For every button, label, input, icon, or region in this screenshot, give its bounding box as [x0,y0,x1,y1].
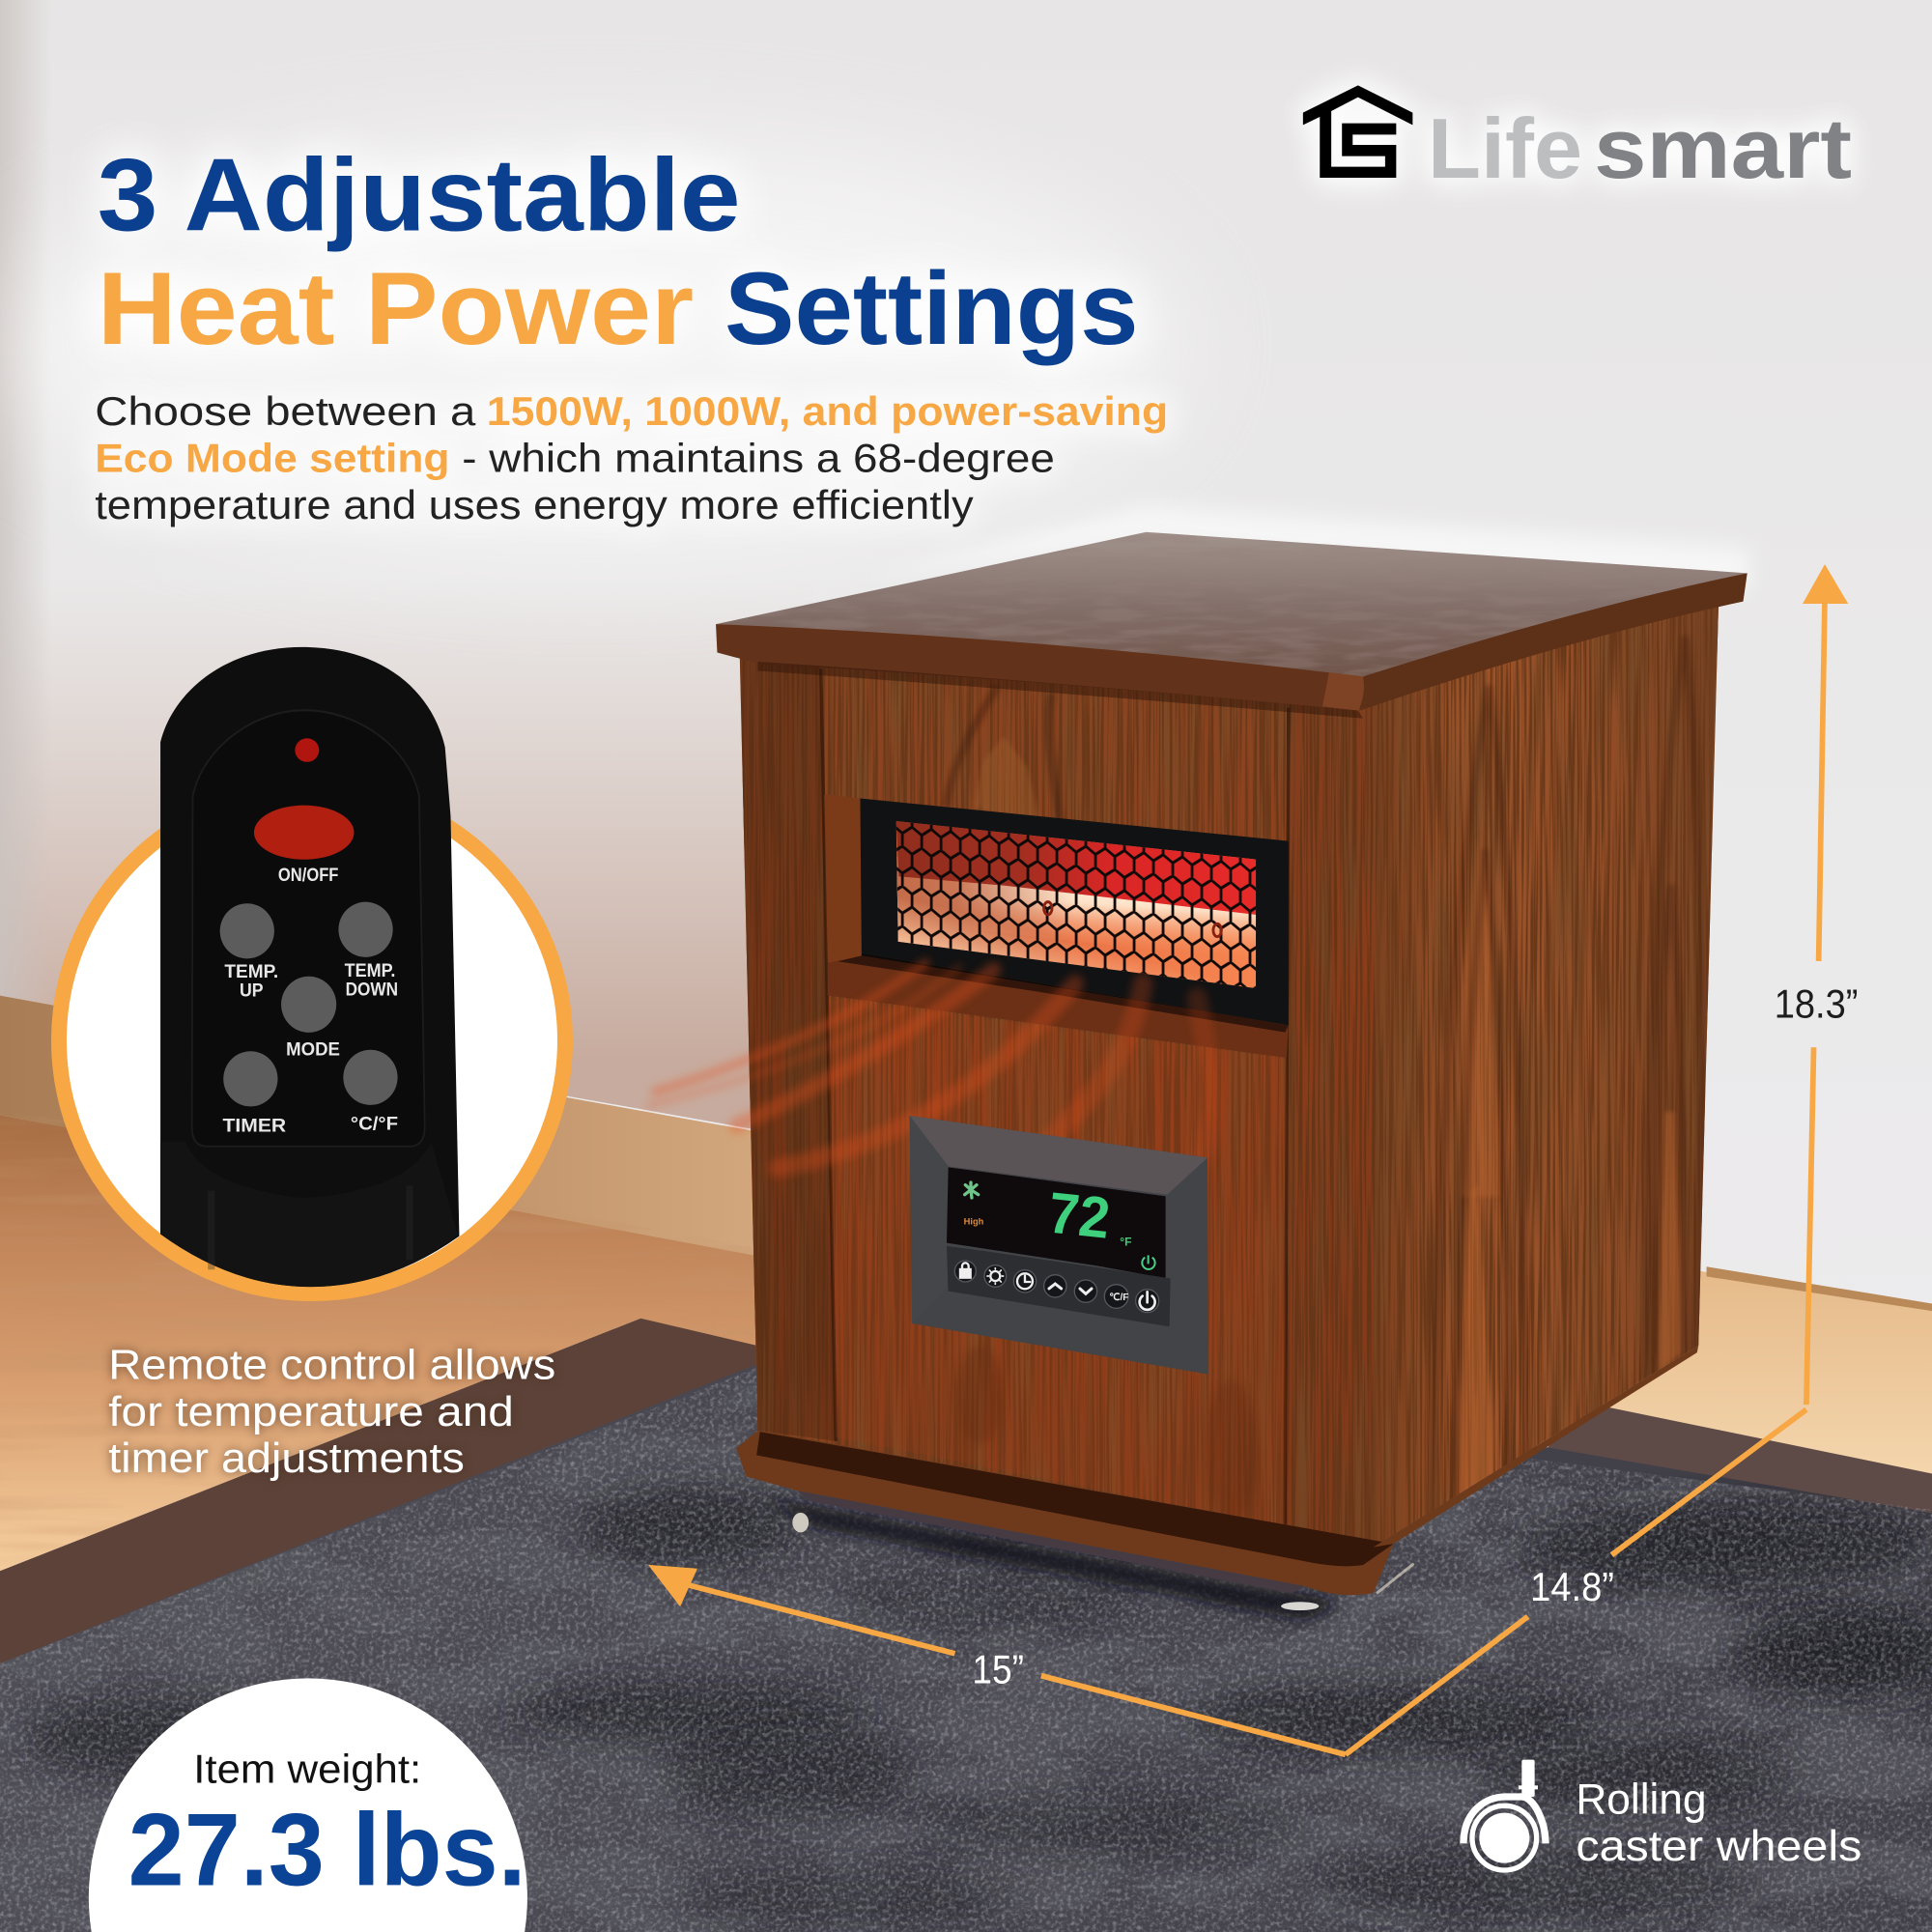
left floor [0,1115,788,1571]
remote caption: timer adjustments [108,1435,465,1482]
control panel: ℃/F [1109,1293,1128,1303]
description line 2: - which maintains a 68-degree [462,436,1055,481]
High label: High [964,1216,984,1226]
caster label [1576,1776,1861,1870]
remote lower ledge [160,1142,458,1287]
heater top rim [716,573,1747,719]
panel bevel [910,1116,1208,1195]
item weight badge [89,1678,527,1932]
depth dimension [1346,1409,1806,1754]
heading line 2: Settings [724,250,1139,366]
wall [0,0,1932,1355]
depth dimension: 14.8” [1530,1564,1614,1609]
button labels: MODE [286,1038,340,1060]
button labels: DOWN [346,980,398,1000]
wall left edge shading [0,0,52,1010]
caster feature [1463,1760,1861,1870]
heading line 1: 3 Adjustable [98,137,741,253]
description line 2: Eco Mode setting [95,436,450,481]
caster label: Rolling [1576,1776,1707,1824]
heater base [736,1346,1698,1610]
button labels: TIMER [223,1115,286,1136]
post divider lines [821,668,1289,1526]
rug blotches [132,1385,1932,1932]
display [947,1167,1166,1278]
caster label: caster wheels [1576,1823,1861,1870]
panel housing [910,1116,1208,1375]
rug pile light [0,1361,1932,1932]
button labels: TEMP. [224,961,278,981]
glow above heater [863,505,1749,591]
logo [1303,85,1852,196]
heat waves [648,963,1210,1218]
right post tone [1285,700,1380,1548]
lower panel warm tint [828,998,1287,1526]
description line 3: temperature and uses energy more efficiently [95,482,974,527]
weight value: 27.3 lbs. [128,1792,526,1908]
remote control [160,647,459,1287]
heater front face [736,644,1387,1554]
caster wheels [792,1513,809,1532]
heading [98,137,1139,366]
heater right side [1374,591,1725,1550]
button labels: UP [240,980,264,1001]
button labels: TEMP. [345,960,395,980]
grey buttons [220,902,398,1106]
rug gap at corner [1377,1564,1414,1593]
caster icon [1463,1760,1546,1870]
button labels [223,865,398,1136]
key strip [947,1246,1171,1326]
remote caption: Remote control allows [108,1342,555,1388]
fan icon [965,1182,979,1198]
heater shelf [828,952,1289,1058]
touch keys [954,1261,1159,1313]
rug edge band right [1528,1403,1932,1528]
LED [295,738,319,762]
wordmark: smart [1594,100,1852,196]
house mark [1303,85,1412,178]
remote faceplate [192,710,425,1147]
grill rivets [1044,902,1221,937]
height dimension [1775,564,1858,1405]
power button [254,806,354,860]
description line 1: 1500W, 1000W, and power-saving [487,388,1168,434]
dimension arrows [648,564,1858,1754]
right floor [1589,1269,1932,1479]
rug pile dark [0,1361,1932,1932]
left baseboard [0,996,788,1264]
front panel arcs [947,687,1258,1522]
hexagon grill [896,821,1256,988]
heater [648,524,1758,1610]
remote caption: for temperature and [108,1389,514,1435]
corner line [1374,711,1380,1548]
wall warm shading [0,579,813,1140]
remote body [160,647,459,1287]
weight label: Item weight: [193,1747,421,1792]
remote circle [59,787,565,1293]
description text [95,388,1168,527]
soft glow behind heading [0,135,1182,554]
glowing element [892,817,1262,998]
wordmark: Life [1428,100,1582,196]
temperature readout: 72 [1045,1180,1113,1251]
underside strip [797,1491,1305,1593]
degree F label: °F [1120,1235,1131,1248]
rug dark patches [25,1485,1932,1927]
heater window recess [824,794,1289,1025]
remote caption [108,1342,555,1482]
right baseboard top edge [1707,1266,1932,1311]
shadow under heater [764,1497,1343,1620]
key icons [960,1263,1155,1310]
heater top surface [717,531,1747,676]
width dimension [648,1565,1346,1754]
floor streak texture [0,1401,431,1548]
height dimension: 18.3” [1775,981,1858,1027]
width dimension: 15” [972,1646,1024,1691]
standby icon [1142,1255,1155,1269]
description line 1: Choose between a [95,388,476,434]
rug [0,1361,1932,1932]
heading line 2: Heat Power [98,250,694,366]
button labels: ON/OFF [278,865,338,885]
rug edge band left [0,1319,788,1663]
button labels: °C/°F [351,1113,398,1134]
control panel [910,1116,1208,1375]
front left post [740,647,836,1441]
